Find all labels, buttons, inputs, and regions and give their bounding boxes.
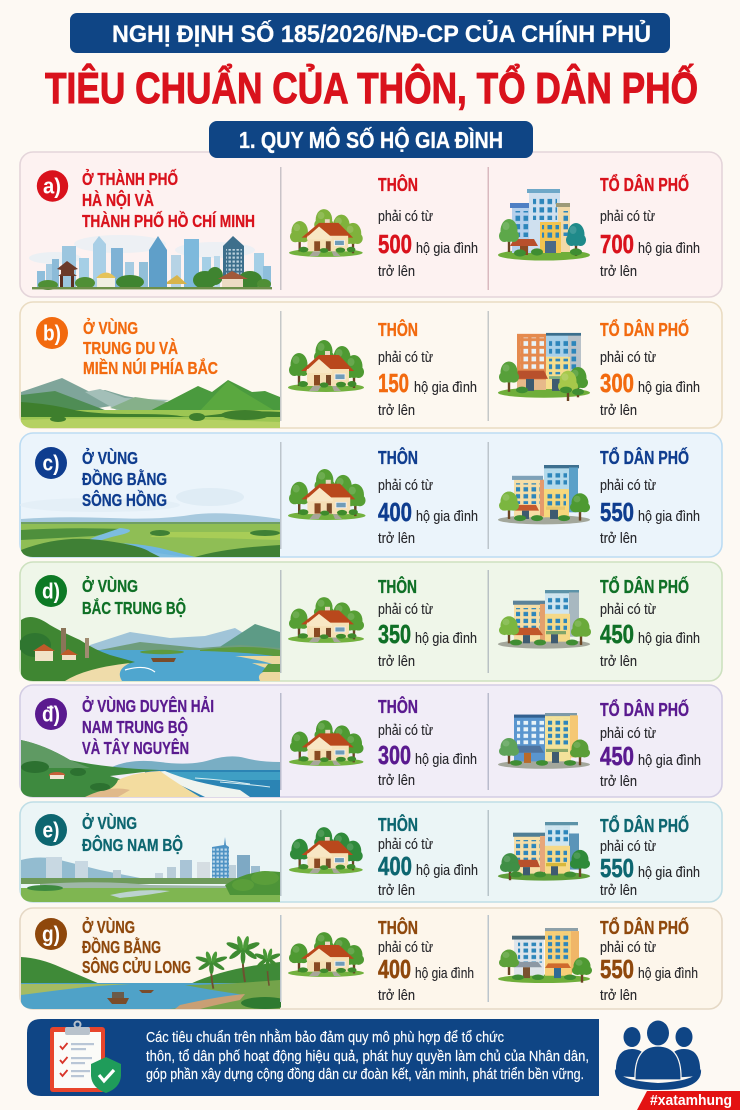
thôn requirement b xyxy=(378,319,477,419)
thôn requirement b: hộ gia đình xyxy=(414,380,477,396)
region label c: SÔNG HỒNG xyxy=(82,489,167,510)
icon: buildings c xyxy=(498,465,590,524)
thôn requirement g xyxy=(378,917,474,1004)
tổ dân phố requirement đ xyxy=(600,699,701,790)
thôn requirement e: hộ gia đình xyxy=(416,863,478,879)
icon: house c xyxy=(288,469,366,520)
tổ dân phố requirement đ: trở lên xyxy=(600,774,637,790)
thôn requirement e: THÔN xyxy=(378,814,418,835)
tổ dân phố requirement c: 550 xyxy=(600,497,634,527)
thôn requirement đ: trở lên xyxy=(378,773,415,789)
thôn requirement c: THÔN xyxy=(378,447,418,468)
tổ dân phố requirement g: trở lên xyxy=(600,988,637,1004)
badge c: c) xyxy=(42,450,60,476)
thôn requirement b: phải có từ xyxy=(378,350,433,366)
tổ dân phố requirement b: phải có từ xyxy=(600,350,656,366)
badge g: g) xyxy=(42,922,60,946)
tổ dân phố requirement a: phải có từ xyxy=(600,209,655,225)
tổ dân phố requirement e: TỔ DÂN PHỐ xyxy=(600,815,689,836)
thôn requirement c: phải có từ xyxy=(378,478,433,494)
tổ dân phố requirement d: 450 xyxy=(600,619,634,649)
panel: d Bắc Trung Bộ xyxy=(19,562,722,681)
tổ dân phố requirement a xyxy=(600,174,700,280)
region label d xyxy=(82,575,186,618)
thôn requirement d: hộ gia đình xyxy=(415,631,477,647)
region label b xyxy=(83,317,218,378)
region label đ: VÀ TÂY NGUYÊN xyxy=(82,737,189,758)
region label đ: Ở VÙNG DUYÊN HẢI xyxy=(82,695,214,716)
thôn requirement e: trở lên xyxy=(378,883,415,899)
thôn requirement g: trở lên xyxy=(378,988,415,1004)
panel: c Đồng bằng sông Hồng xyxy=(20,433,722,557)
tổ dân phố requirement e: phải có từ xyxy=(600,839,656,855)
tổ dân phố requirement đ: phải có từ xyxy=(600,726,656,742)
region label a xyxy=(82,168,255,231)
tổ dân phố requirement g xyxy=(600,917,698,1004)
thôn requirement a: THÔN xyxy=(378,174,418,195)
scene: city skyline xyxy=(29,235,272,290)
panel: g Đồng bằng sông Cửu Long xyxy=(20,908,722,1009)
badge d: d) xyxy=(42,578,60,604)
icon: buildings g xyxy=(498,928,592,983)
region label b: TRUNG DU VÀ xyxy=(83,337,178,358)
footer text xyxy=(146,1029,589,1083)
footer text: góp phần xây dựng cộng đồng dân cư đoàn kết, văn minh, phát triển bền vững. xyxy=(146,1066,584,1083)
region label đ: NAM TRUNG BỘ xyxy=(82,716,188,737)
tổ dân phố requirement d: phải có từ xyxy=(600,602,656,618)
icon: house a xyxy=(289,209,363,257)
region label g: SÔNG CỬU LONG xyxy=(82,956,191,977)
region label g: ĐỒNG BẰNG xyxy=(82,936,161,957)
badge a: a) xyxy=(43,174,61,198)
scene: riverside city xyxy=(21,837,280,902)
tổ dân phố requirement g: hộ gia đình xyxy=(638,966,698,982)
thôn requirement g: 400 xyxy=(378,954,411,984)
thôn requirement đ: THÔN xyxy=(378,696,418,717)
thôn requirement c: trở lên xyxy=(378,531,415,547)
tổ dân phố requirement c: phải có từ xyxy=(600,478,656,494)
thôn requirement a: hộ gia đình xyxy=(416,241,478,257)
thôn requirement d: trở lên xyxy=(378,654,415,670)
tổ dân phố requirement d: hộ gia đình xyxy=(638,631,700,647)
thôn requirement e: 400 xyxy=(378,851,412,881)
thôn requirement a: 500 xyxy=(378,229,412,259)
thôn requirement đ: 300 xyxy=(378,740,411,770)
thôn requirement d xyxy=(378,576,477,670)
badge b: b) xyxy=(43,320,61,346)
tổ dân phố requirement b: 300 xyxy=(600,368,634,398)
tổ dân phố requirement c: trở lên xyxy=(600,531,637,547)
icon: clipboard with shield xyxy=(50,1022,121,1093)
icon: buildings a xyxy=(498,189,590,260)
panel: e Đông Nam Bộ xyxy=(20,802,722,902)
thôn requirement g: phải có từ xyxy=(378,940,433,956)
scene: coast and river xyxy=(19,617,280,681)
tổ dân phố requirement g: 550 xyxy=(600,954,634,984)
tổ dân phố requirement c xyxy=(600,447,700,547)
tổ dân phố requirement a: trở lên xyxy=(600,264,637,280)
panel: đ Duyên hải Nam Trung Bộ và Tây Nguyên xyxy=(20,685,722,797)
hashtag tag: #xatamhung xyxy=(650,1092,732,1109)
region label a: HÀ NỘI VÀ xyxy=(82,189,154,210)
tổ dân phố requirement c: hộ gia đình xyxy=(638,509,700,525)
scene: mountains xyxy=(21,378,280,429)
badge e xyxy=(35,814,67,846)
icon: buildings b xyxy=(498,333,590,401)
tổ dân phố requirement c: TỔ DÂN PHỐ xyxy=(600,447,689,468)
section heading: 1. QUY MÔ SỐ HỘ GIA ĐÌNH xyxy=(239,126,503,153)
icon: house g xyxy=(288,932,364,977)
region label e: Ở VÙNG xyxy=(82,812,137,833)
icon: buildings e xyxy=(498,822,590,881)
thôn requirement d: 350 xyxy=(378,619,411,649)
tổ dân phố requirement b xyxy=(600,319,700,419)
thôn requirement d: THÔN xyxy=(378,576,417,597)
footer text: thôn, tổ dân phố hoạt động hiệu quả, phát huy quyền làm chủ của Nhân dân, xyxy=(146,1048,589,1065)
region label e: ĐÔNG NAM BỘ xyxy=(82,834,183,855)
icon: community people xyxy=(615,1020,701,1090)
badge b xyxy=(36,317,68,349)
badge đ xyxy=(35,698,67,730)
region label a: THÀNH PHỐ HỒ CHÍ MINH xyxy=(82,210,255,231)
icon: house b xyxy=(288,340,364,392)
region label b: MIỀN NÚI PHÍA BẮC xyxy=(83,357,218,378)
thôn requirement g: hộ gia đình xyxy=(415,966,474,982)
tổ dân phố requirement d: TỔ DÂN PHỐ xyxy=(600,576,689,597)
thôn requirement e xyxy=(378,814,478,899)
thôn requirement c xyxy=(378,447,478,547)
icon: house đ xyxy=(289,720,363,766)
tổ dân phố requirement đ: hộ gia đình xyxy=(638,753,701,769)
tổ dân phố requirement e: hộ gia đình xyxy=(638,865,700,881)
badge d xyxy=(35,575,67,607)
tổ dân phố requirement e: 550 xyxy=(600,853,634,883)
thôn requirement c: 400 xyxy=(378,497,412,527)
badge g xyxy=(35,918,67,950)
badge e: e) xyxy=(42,818,60,842)
region label d: Ở VÙNG xyxy=(82,575,138,596)
thôn requirement g: THÔN xyxy=(378,917,418,938)
region label c xyxy=(82,447,167,510)
tổ dân phố requirement a: TỔ DÂN PHỐ xyxy=(600,174,689,195)
region label g xyxy=(82,916,191,977)
header bar: decree title: NGHỊ ĐỊNH SỐ 185/2026/NĐ-CP CỦA CHÍNH PHỦ xyxy=(112,19,651,48)
section heading xyxy=(209,121,533,158)
tổ dân phố requirement đ: 450 xyxy=(600,741,634,771)
tổ dân phố requirement b: trở lên xyxy=(600,403,637,419)
tổ dân phố requirement a: hộ gia đình xyxy=(638,241,700,257)
thôn requirement đ: phải có từ xyxy=(378,723,433,739)
panel: a Hà Nội và TP HCM xyxy=(20,152,722,297)
tổ dân phố requirement d xyxy=(600,576,700,670)
thôn requirement b: trở lên xyxy=(378,403,415,419)
icon: house e xyxy=(289,827,363,874)
header bar: decree title xyxy=(70,13,670,53)
thôn requirement a: trở lên xyxy=(378,264,415,280)
footer panel xyxy=(27,1019,599,1096)
thôn requirement c: hộ gia đình xyxy=(416,509,478,525)
icon: buildings đ xyxy=(498,713,590,769)
region label g: Ở VÙNG xyxy=(82,916,135,937)
region label a: Ở THÀNH PHỐ xyxy=(82,168,178,189)
region label d: BẮC TRUNG BỘ xyxy=(82,597,186,618)
thôn requirement đ xyxy=(378,696,477,789)
tổ dân phố requirement b: TỔ DÂN PHỐ xyxy=(600,319,689,340)
region label đ xyxy=(82,695,214,758)
thôn requirement b: THÔN xyxy=(378,319,418,340)
region label c: Ở VÙNG xyxy=(82,447,138,468)
tổ dân phố requirement g: phải có từ xyxy=(600,940,656,956)
region label c: ĐỒNG BẰNG xyxy=(82,468,167,489)
region label b: Ở VÙNG xyxy=(83,317,138,338)
tổ dân phố requirement e xyxy=(600,815,700,899)
scene: beach and sea xyxy=(21,740,280,797)
tổ dân phố requirement đ: TỔ DÂN PHỐ xyxy=(600,699,689,720)
tổ dân phố requirement g: TỔ DÂN PHỐ xyxy=(600,917,689,938)
region label e xyxy=(82,812,183,855)
panel: b Trung du và miền núi phía Bắc xyxy=(20,302,722,429)
icon: buildings d xyxy=(498,590,591,649)
footer text: Các tiêu chuẩn trên nhằm bảo đảm quy mô phù hợp để tổ chức xyxy=(146,1029,504,1046)
thôn requirement e: phải có từ xyxy=(378,837,433,853)
tổ dân phố requirement a: 700 xyxy=(600,229,634,259)
scene: river delta xyxy=(20,488,280,557)
tổ dân phố requirement e: trở lên xyxy=(600,883,637,899)
thôn requirement a xyxy=(378,174,478,280)
thôn requirement a: phải có từ xyxy=(378,209,433,225)
badge đ: đ) xyxy=(42,702,60,726)
scene: Mekong river with palms xyxy=(21,935,289,1009)
badge c xyxy=(35,447,67,479)
thôn requirement đ: hộ gia đình xyxy=(415,752,477,768)
tổ dân phố requirement b: hộ gia đình xyxy=(638,380,700,396)
icon: house d xyxy=(288,597,364,643)
badge a xyxy=(37,170,68,202)
thôn requirement d: phải có từ xyxy=(378,602,433,618)
thôn requirement b: 150 xyxy=(378,368,409,398)
tổ dân phố requirement d: trở lên xyxy=(600,654,637,670)
